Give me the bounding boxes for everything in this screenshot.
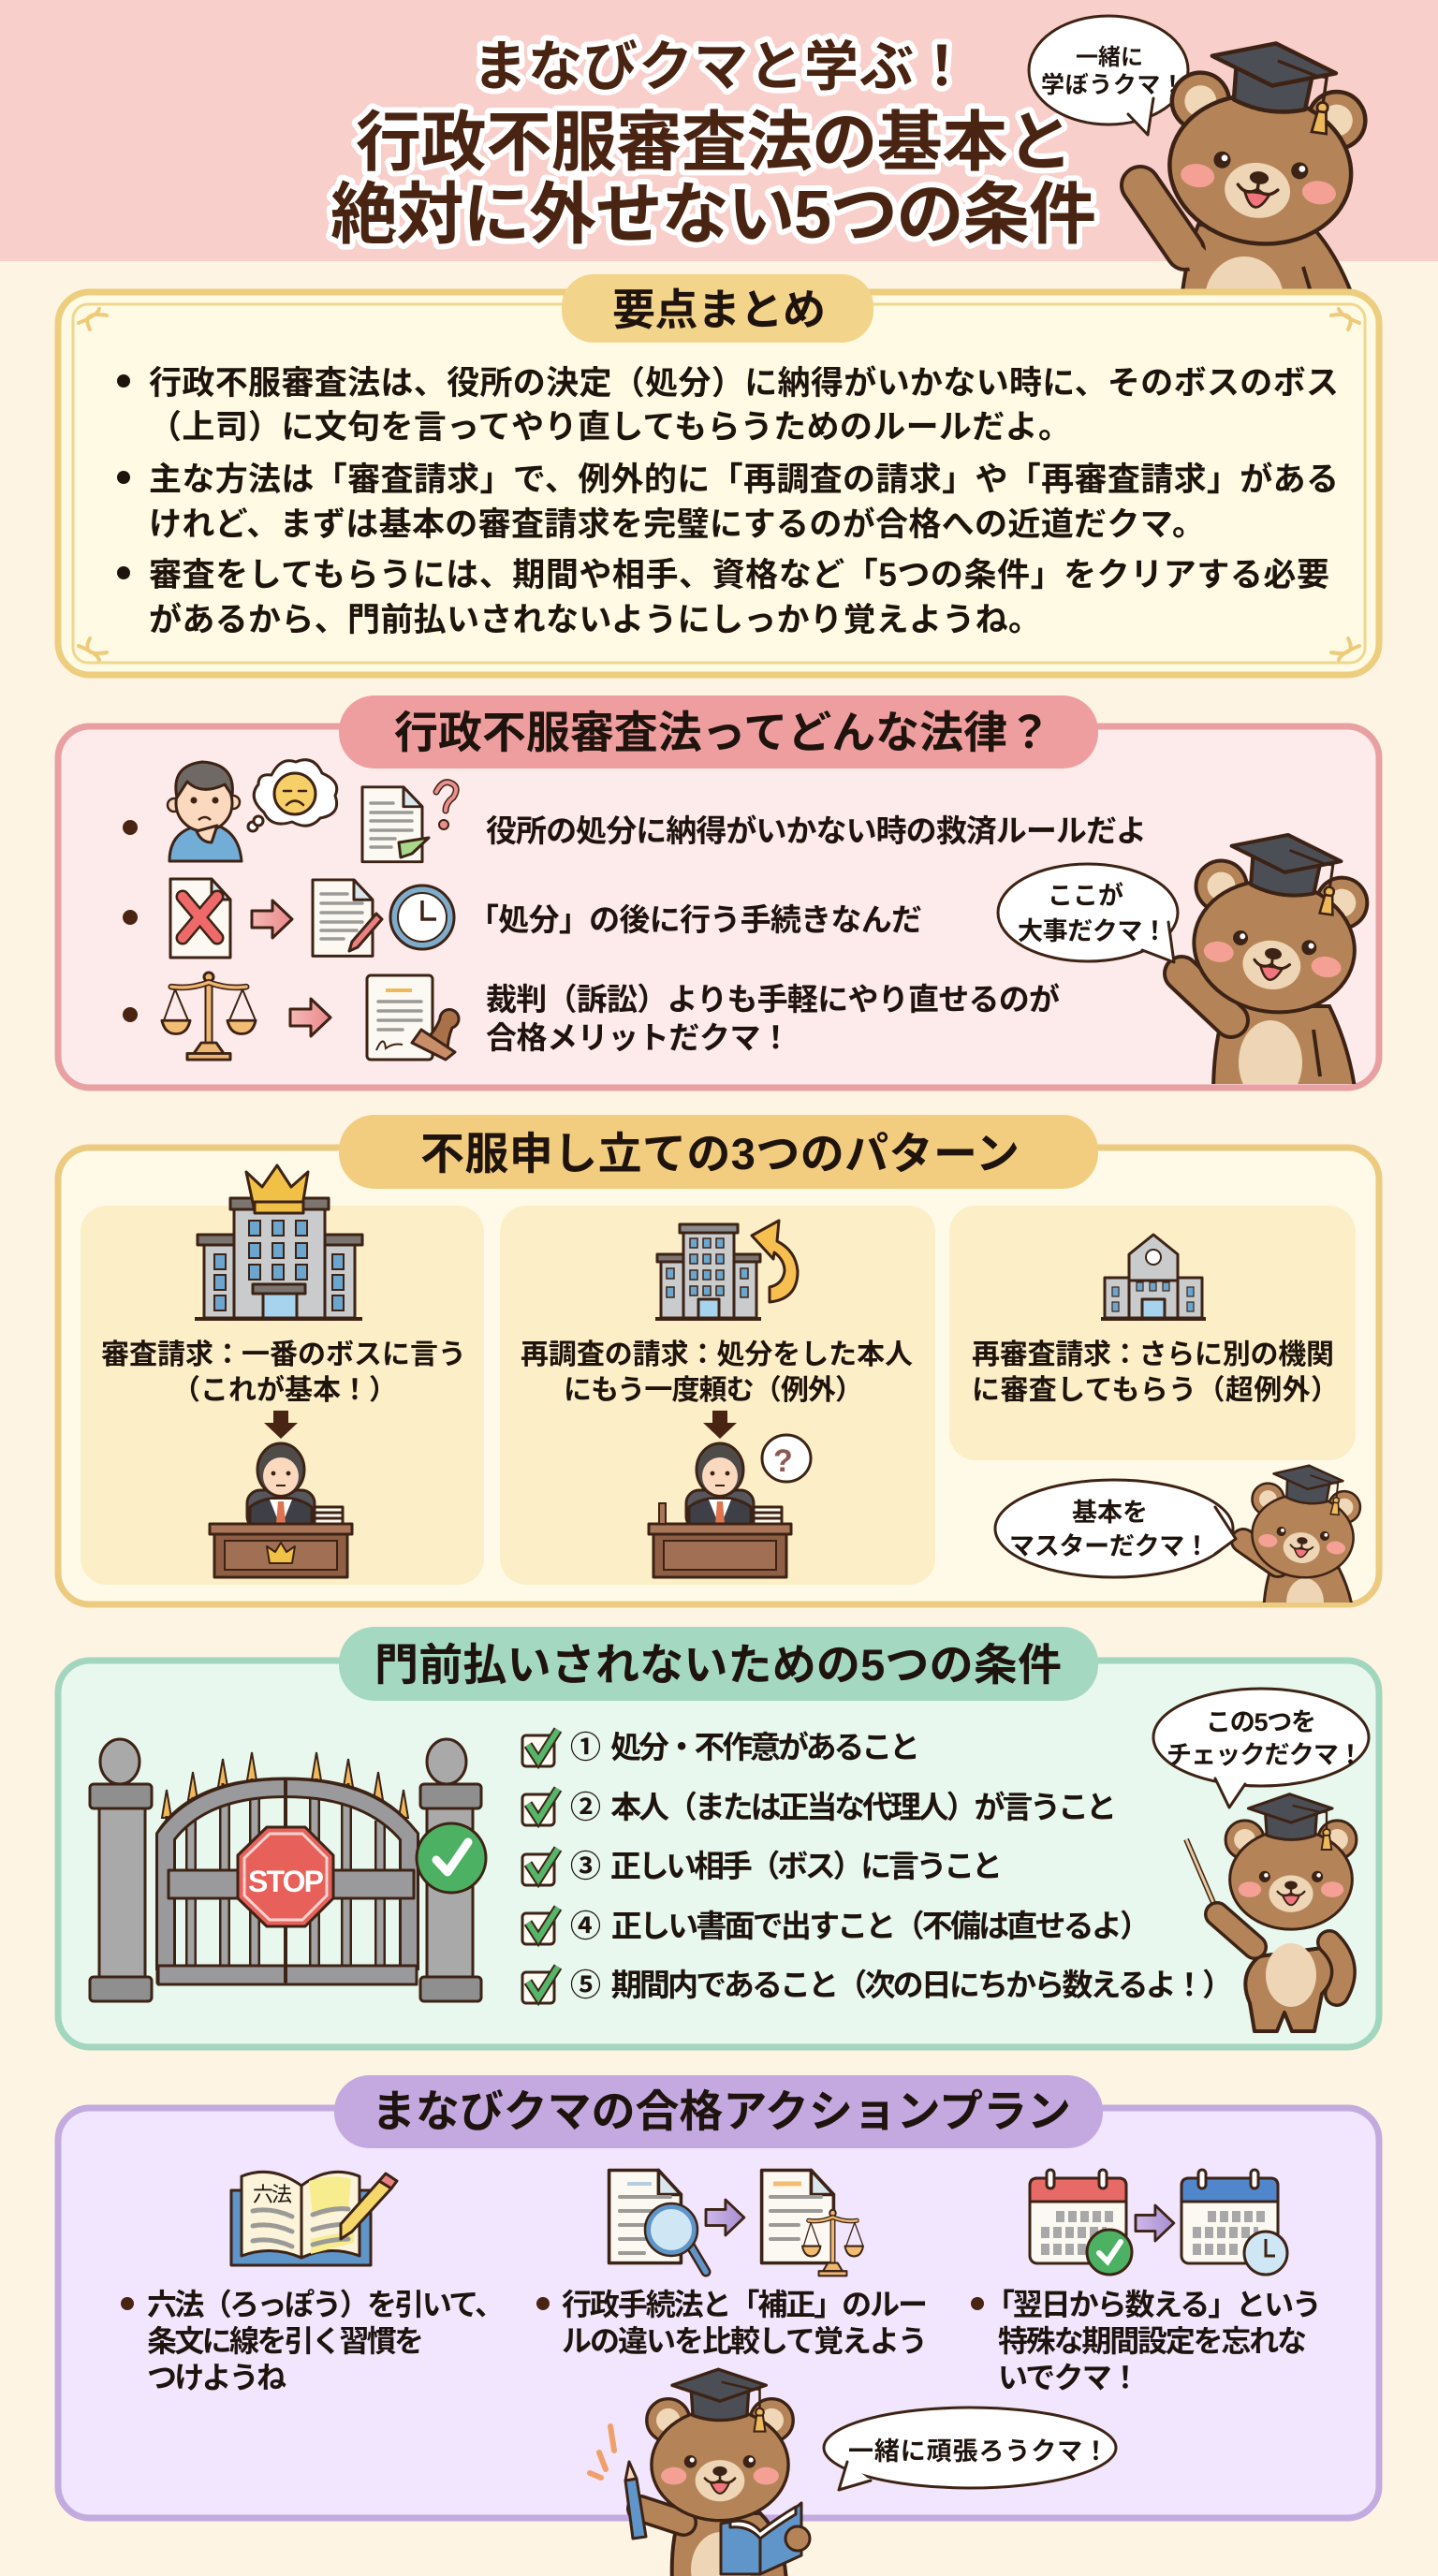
text: action 2: ルの違いを比較して覚えよう xyxy=(562,2324,928,2358)
panel: three patterns xyxy=(58,1115,1379,1627)
speech bubble: check these five xyxy=(1153,1689,1369,1808)
text: action 2: 行政手続法と「補正」のルー xyxy=(562,2288,928,2321)
text: review request: 審査請求：一番のボスに言う xyxy=(101,1339,466,1370)
arrow xyxy=(290,999,330,1036)
arrow: down xyxy=(703,1411,737,1439)
summary bullet 3: 審査をしてもらうには、期間や相手、資格など「5つの条件」をクリアする必要 xyxy=(149,557,1329,593)
header bear mascot xyxy=(1120,41,1368,289)
bear mascot: patterns panel xyxy=(1243,1460,1364,1627)
text: re-investigation: 再調査の請求：処分をした本人 xyxy=(521,1339,913,1370)
heading: action plan: まなびクマの合格アクションプラン xyxy=(372,2086,1071,2136)
icon: closed gate with stop sign xyxy=(90,1739,486,2001)
summary bullet 1 xyxy=(117,365,1339,446)
title xyxy=(330,37,1096,253)
icon: officer at desk with question: ? xyxy=(773,1443,793,1479)
text: action 1: つけようね xyxy=(147,2361,286,2394)
checklist item 2: ② 本人（または正当な代理人）が言うこと xyxy=(570,1790,1117,1824)
icon: rejected document xyxy=(170,879,230,958)
panel: summary xyxy=(58,274,1379,675)
checklist item 5: ⑤ 期間内であること（次の日にちから数えるよ！） xyxy=(570,1968,1233,2002)
text: re-review xyxy=(972,1339,1339,1406)
panel: action plan xyxy=(58,2075,1379,2576)
icon: document with question mark xyxy=(362,783,456,862)
heading: action plan xyxy=(334,2075,1103,2148)
heading: patterns xyxy=(339,1115,1098,1189)
text: action 3: いでクマ！ xyxy=(998,2361,1140,2394)
heading: law: 行政不服審査法ってどんな法律？ xyxy=(394,708,1051,757)
icon: signed document with stamp xyxy=(367,975,459,1060)
summary bullet 1: （上司）に文句を言ってやり直してもらうためのルールだよ。 xyxy=(149,409,1071,446)
summary bullet 1: 行政不服審査法は、役所の決定（処分）に納得がいかない時に、そのボスのボス xyxy=(149,365,1339,402)
heading: law xyxy=(339,695,1098,768)
summary bullet 3: があるから、門前払いされないようにしっかり覚えようね。 xyxy=(149,602,1041,638)
text: action 3: 「翌日から数える」という xyxy=(985,2288,1322,2321)
text: action 3: 特殊な期間設定を忘れな xyxy=(998,2324,1307,2358)
icon: calendars xyxy=(1030,2170,1287,2275)
checklist item 4: ④ 正しい書面で出すこと（不備は直せるよ） xyxy=(570,1909,1151,1943)
speech bubble: master the basics xyxy=(995,1480,1236,1577)
text: after disposition: 「処分」の後に行う手続きなんだ xyxy=(468,902,922,937)
icon: clock tower building xyxy=(1101,1235,1206,1321)
card: re-review xyxy=(949,1206,1356,1460)
summary bullet 2 xyxy=(117,461,1339,543)
speech bubble: check these five: この5つを xyxy=(1206,1708,1316,1736)
icon: worried person xyxy=(168,762,242,861)
text: review request xyxy=(101,1339,466,1406)
text: action 1: 六法（ろっぽう）を引いて、 xyxy=(147,2288,505,2321)
icon: document with pencil and clock xyxy=(313,880,454,956)
card: re-investigation xyxy=(500,1206,935,1585)
speech bubble: let's work hard xyxy=(824,2408,1116,2490)
text: easier than lawsuit xyxy=(486,982,1060,1055)
icon: thought cloud with sad face xyxy=(248,760,337,831)
title: 行政不服審査法の基本と xyxy=(356,106,1073,179)
bear mascot: law panel xyxy=(1180,823,1375,1105)
summary bullet 2: 主な方法は「審査請求」で、例外的に「再調査の請求」や「再審査請求」がある xyxy=(149,461,1339,498)
text: easier than lawsuit: 合格メリットだクマ！ xyxy=(486,1020,791,1055)
icon: officer at desk with question xyxy=(649,1435,811,1577)
bullets xyxy=(123,820,138,1022)
icon: closed gate with stop sign: STOP xyxy=(248,1865,324,1898)
text: relief rule: 役所の処分に納得がいかない時の救済ルールだよ xyxy=(486,813,1147,848)
heading: summary xyxy=(562,274,873,343)
text: action 1: 条文に線を引く習慣を xyxy=(147,2324,424,2358)
title: 絶対に外せない5つの条件 xyxy=(330,178,1096,253)
text: review request: （これが基本！） xyxy=(172,1374,397,1406)
bear mascot: pen and book xyxy=(590,2369,810,2576)
icon: open law book and pencil: 六法 xyxy=(253,2183,292,2206)
text: re-investigation xyxy=(521,1339,913,1406)
text: easier than lawsuit: 裁判（訴訟）よりも手軽にやり直せるのが xyxy=(486,982,1060,1017)
checklist item 1: ① 処分・不作意があること xyxy=(570,1730,920,1764)
speech bubble: master the basics: マスターだクマ！ xyxy=(1009,1532,1210,1560)
heading: conditions xyxy=(339,1627,1098,1701)
arrow xyxy=(252,900,292,938)
header band xyxy=(0,0,1438,261)
checklist item 3: ③ 正しい相手（ボス）に言うこと xyxy=(570,1849,1003,1883)
summary bullet 3 xyxy=(117,557,1329,638)
icon: building with return arrow xyxy=(655,1221,798,1321)
text: action 3 xyxy=(971,2288,1322,2394)
text: re-review: 再審査請求：さらに別の機関 xyxy=(972,1339,1334,1370)
icon: boss at desk with crown xyxy=(210,1443,352,1577)
icon: open law book and pencil xyxy=(231,2172,397,2265)
header speech bubble: 一緒に xyxy=(1076,45,1143,70)
speech bubble: important xyxy=(998,864,1178,962)
header speech bubble xyxy=(1029,16,1188,135)
panel: five conditions xyxy=(58,1627,1379,2047)
text: action 1 xyxy=(121,2288,505,2394)
text: re-investigation: にもう一度頼む（例外） xyxy=(564,1375,863,1406)
speech bubble: master the basics: 基本を xyxy=(1072,1499,1148,1527)
text: action 2 xyxy=(536,2288,928,2358)
speech bubble: let's work hard: 一緒に頑張ろうクマ！ xyxy=(848,2437,1108,2466)
heading: summary: 要点まとめ xyxy=(612,285,826,334)
bear mascot: pointer xyxy=(1186,1794,1357,2031)
heading: patterns: 不服申し立ての3つのパターン xyxy=(420,1129,1020,1178)
card: review request xyxy=(81,1165,484,1585)
speech bubble: check these five: チェックだクマ！ xyxy=(1167,1741,1363,1769)
summary bullet 2: けれど、まずは基本の審査請求を完璧にするのが合格への近道だクマ。 xyxy=(149,506,1205,543)
speech bubble: important: ここが xyxy=(1048,881,1123,910)
header speech bubble: 学ぼうクマ！ xyxy=(1041,72,1184,98)
icon: crowned building xyxy=(195,1165,362,1321)
heading: conditions: 門前払いされないための5つの条件 xyxy=(374,1640,1062,1690)
text: re-review: に審査してもらう（超例外） xyxy=(972,1375,1339,1406)
arrow: down xyxy=(264,1411,298,1439)
icon: comparing documents xyxy=(609,2171,863,2276)
panel: what kind of law xyxy=(58,695,1379,1105)
icon: scales xyxy=(162,973,256,1060)
speech bubble: important: 大事だクマ！ xyxy=(1018,917,1167,945)
title: まなびクマと学ぶ！ xyxy=(473,37,969,97)
